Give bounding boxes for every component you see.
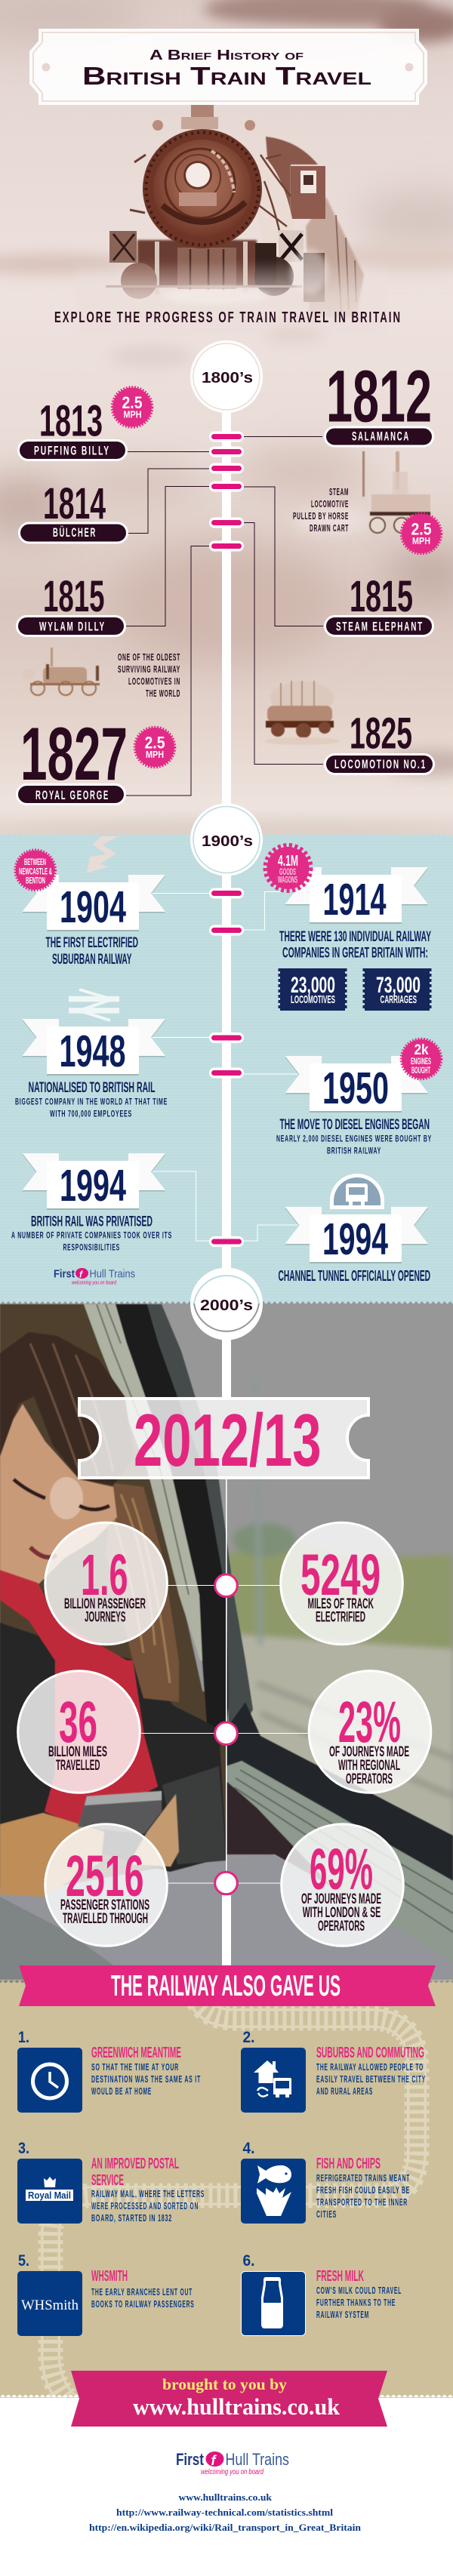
caption: Wylam Dilly xyxy=(118,651,180,699)
icon: milk bottle xyxy=(261,2277,283,2328)
stat: 5249 miles of track electrified xyxy=(281,1522,402,1645)
entry: 1827 Royal George: 1827 xyxy=(20,712,128,796)
item 5: WHSmith: 5. xyxy=(18,2252,29,2270)
entry: 1994 privatised: 1994 xyxy=(60,1161,126,1211)
timeline ticks 1800s xyxy=(209,432,244,551)
item 1: Greenwich Meantime: DESTINATION WAS THE SAME AS IT xyxy=(91,2074,201,2085)
entry: 1815 Steam Elephant: 1815 xyxy=(350,572,413,621)
entry: 1815 Steam Elephant xyxy=(325,572,433,636)
badge: between Newcastle and Benton xyxy=(15,850,56,890)
timeline trunk xyxy=(222,408,231,1965)
item 4: fish and chips: 4. xyxy=(243,2140,255,2157)
node: 2000's xyxy=(190,1268,263,1340)
item 4: fish and chips: CITIES xyxy=(316,2209,337,2220)
entry: 1813 Puffing Billy xyxy=(18,397,127,460)
section: beige legacy background with track xyxy=(0,1980,453,2576)
stat: 5249 miles of track electrified: ELECTRIFIED xyxy=(316,1609,365,1626)
entry: 1813 Puffing Billy: PUFFING BILLY xyxy=(34,444,110,457)
entry: 1814 Blucher xyxy=(20,479,127,543)
item 5: WHSmith: BOOKS TO RAILWAY PASSENGERS xyxy=(91,2299,195,2310)
stat: 5249 miles of track electrified: 5249 xyxy=(300,1543,381,1608)
item 1: Greenwich Meantime: GREENWICH MEANTIME xyxy=(91,2045,181,2061)
item 6: fresh milk: RAILWAY SYSTEM xyxy=(316,2310,369,2320)
item 5: WHSmith: THE EARLY BRANCHES LENT OUT xyxy=(91,2287,193,2297)
stat: 2516 passenger stations: 2516 xyxy=(66,1844,143,1909)
stat: 36 billion miles travelled: BILLION MILES xyxy=(48,1743,107,1760)
entry: 1815 Wylam Dilly: 1815 xyxy=(43,572,104,621)
title line 2: British Train Travel xyxy=(82,62,371,90)
sources: http://en.wikipedia.org/wiki/Rail_transport_in_Great_Britain xyxy=(89,2522,361,2533)
item 1: Greenwich Meantime: SO THAT THE TIME AT YOUR xyxy=(91,2062,179,2073)
badge: between Newcastle and Benton: BETWEEN xyxy=(24,857,46,867)
locomotive top plate xyxy=(181,117,218,129)
entry: 1994 channel tunnel: 1994 xyxy=(322,1214,388,1264)
stat: 2516 passenger stations: PASSENGER STATIONS xyxy=(60,1897,149,1913)
stat: 36 billion miles travelled xyxy=(18,1671,140,1793)
stat: 23% of journeys made with regional operators: OPERATORS xyxy=(346,1771,393,1787)
section: 1800s sky background xyxy=(0,0,453,839)
entry: 1813 Puffing Billy: 1813 xyxy=(39,397,103,445)
banner: the railway also gave us xyxy=(19,1965,436,2006)
locomotive lower body xyxy=(137,240,257,287)
badge: 1813 speed: 2.5 xyxy=(122,393,142,412)
badge: 1827 speed: 2.5 xyxy=(145,734,165,752)
logo: First Hull Trains small: welcoming you on board xyxy=(72,1280,117,1286)
stat: 23% of journeys made with regional operators xyxy=(309,1671,431,1793)
stat stamp: 73,000 carriages: CARRIAGES xyxy=(381,993,417,1006)
item 2: Suburbs and commuting: 2. xyxy=(243,2029,255,2046)
entry: 1994 privatised: A NUMBER OF PRIVATE COMPANIES TOOK OVER ITS xyxy=(11,1230,172,1241)
entry: 1994 privatised: BRITISH RAIL WAS PRIVATISED xyxy=(31,1214,153,1230)
caption: Wylam Dilly: LOCOMOTIVES IN xyxy=(128,676,180,687)
locomotive headlight xyxy=(183,161,212,189)
item 6: fresh milk xyxy=(242,2252,402,2335)
infographic canvas: LOCOMOTIVE xyxy=(311,498,349,509)
logo: First Hull Trains large: Hull Trains xyxy=(225,2450,289,2469)
caption: Salamanca: DRAWN CART xyxy=(310,522,349,534)
banner: brought to you by: www.hulltrains.co.uk xyxy=(133,2393,341,2420)
stat: 1.6 billion passenger journeys: 1.6 xyxy=(81,1543,128,1608)
stat stamp: 23,000 locomotives: 23,000 xyxy=(291,973,335,998)
entry: 1827 Royal George xyxy=(17,712,128,805)
timeline nodes 2000s xyxy=(215,1574,237,1894)
logo: First Hull Trains large: welcoming you on board xyxy=(201,2468,263,2476)
item 3: improved postal service: 3. xyxy=(18,2140,29,2157)
infographic canvas: STEAM xyxy=(329,486,349,497)
badge: 4.1M goods wagons: GOODS xyxy=(279,866,296,877)
entry: 1950 xyxy=(276,1056,432,1156)
node: 1800's: 1800’s xyxy=(202,370,253,386)
stat: 69% of journeys made with London and SE operators: OPERATORS xyxy=(318,1918,365,1934)
photo: window frame xyxy=(0,1304,453,1966)
node: 1900's xyxy=(190,803,263,876)
badge: 1827 speed xyxy=(134,727,175,768)
stat stamp: 23,000 locomotives xyxy=(280,968,345,1011)
stat: 5249 miles of track electrified: MILES OF TRACK xyxy=(308,1596,374,1612)
connectors 1800s xyxy=(126,436,323,796)
item 1: Greenwich Meantime: WOULD BE AT HOME xyxy=(91,2086,152,2097)
node: 1900's: 1900’s xyxy=(202,833,253,850)
sources xyxy=(89,2492,361,2533)
stat: 69% of journeys made with London and SE operators: 69% xyxy=(310,1837,373,1902)
locomotive side boiler xyxy=(255,149,296,245)
icon: British Rail double arrow xyxy=(69,989,119,1020)
stat stamp: 73,000 carriages: 73,000 xyxy=(376,973,421,998)
badge: 2k engines bought xyxy=(401,1039,442,1079)
badge: 1827 speed: MPH xyxy=(146,749,164,760)
item 5: WHSmith xyxy=(17,2252,195,2336)
timeline ticks 1900s xyxy=(209,888,244,1247)
entry: 1994 privatised: RESPONSIBILITIES xyxy=(63,1242,120,1253)
node: 2000's: 2000’s xyxy=(200,1297,253,1314)
section: 2000s photograph background xyxy=(0,1301,453,1993)
entry: 1914: 1914 xyxy=(323,875,387,925)
stat: 23% of journeys made with regional operators: 23% xyxy=(338,1690,401,1755)
item 5: WHSmith: WHSMITH xyxy=(91,2268,128,2285)
logo: First Hull Trains small xyxy=(54,1268,135,1286)
item 2: Suburbs and commuting: AND RURAL AREAS xyxy=(316,2086,373,2097)
locomotive pilot rail xyxy=(106,285,302,288)
stat: 36 billion miles travelled: TRAVELLED xyxy=(56,1757,100,1774)
logo: First Hull Trains large: First xyxy=(176,2450,205,2469)
locomotive tender xyxy=(266,137,318,216)
entry: 1904: THE FIRST ELECTRIFIED xyxy=(45,934,138,951)
locomotive boiler front xyxy=(143,129,262,248)
locomotive carriages xyxy=(306,197,364,317)
ticket: 2012/13: 2012/13 xyxy=(134,1399,322,1482)
entry: 1994 channel tunnel xyxy=(278,1207,430,1285)
photo: woman xyxy=(0,1332,226,1897)
caption: Wylam Dilly: SURVIVING RAILWAY xyxy=(118,663,180,675)
item 3: improved postal service: BOARD, STARTED IN 1832 xyxy=(91,2213,172,2224)
stat: 2516 passenger stations xyxy=(45,1824,167,1946)
stat: 1.6 billion passenger journeys: BILLION PASSENGER xyxy=(64,1596,146,1612)
entry: 1904 xyxy=(23,875,165,968)
photo: table xyxy=(0,1854,453,1993)
item 6: fresh milk: 6. xyxy=(243,2252,255,2270)
stat: 69% of journeys made with London and SE operators xyxy=(282,1824,403,1946)
stat: 69% of journeys made with London and SE operators: OF JOURNEYS MADE xyxy=(301,1891,381,1907)
item 3: improved postal service xyxy=(17,2140,205,2224)
caption: Wylam Dilly: THE WORLD xyxy=(146,688,180,699)
item 3: improved postal service: SERVICE xyxy=(91,2172,124,2189)
title line 1: A Brief History of xyxy=(149,48,304,63)
entry: 1948 xyxy=(15,1019,168,1119)
entry: 1948: NATIONALISED TO BRITISH RAIL xyxy=(29,1079,156,1096)
item 3: improved postal service: WERE PROCESSED AND SORTED ON xyxy=(91,2201,199,2211)
badge: between Newcastle and Benton: NEWCASTLE & xyxy=(19,866,52,877)
title plaque xyxy=(29,29,427,105)
entry: 1948: BIGGEST COMPANY IN THE WORLD AT THAT TIME xyxy=(15,1096,168,1106)
item 3: improved postal service: RAILWAY MAIL, WHERE THE LETTERS xyxy=(91,2189,205,2199)
sources: http://www.railway-technical.com/statistics.shtml xyxy=(116,2507,334,2518)
entry: 1950: BRITISH RAILWAY xyxy=(327,1146,381,1156)
entry: 1994 privatised xyxy=(11,1153,172,1253)
badge: 4.1M goods wagons: 4.1M xyxy=(278,853,298,869)
badge: Salamanca speed xyxy=(401,513,442,554)
mist over locomotive xyxy=(76,260,385,336)
badge: 1813 speed xyxy=(112,387,153,427)
illustration: Salamanca locomotive xyxy=(362,451,430,533)
badge: 4.1M goods wagons: WAGONS xyxy=(278,874,297,885)
entry: 1812 Salamanca: SALAMANCA xyxy=(352,430,410,444)
stat stamp: 73,000 carriages xyxy=(365,968,430,1011)
stat: 69% of journeys made with London and SE operators: WITH LONDON & SE xyxy=(303,1904,381,1921)
illustration: Wylam Dilly locomotive xyxy=(23,648,100,695)
railway track xyxy=(51,2000,417,2404)
stat: 1.6 billion passenger journeys xyxy=(45,1522,167,1645)
badge: 2k engines bought: BOUGHT xyxy=(411,1065,430,1076)
icon: lightning bolt xyxy=(87,836,119,873)
caption: Salamanca xyxy=(293,486,349,534)
logo: First Hull Trains small: First xyxy=(54,1268,75,1280)
caption: Wylam Dilly: ONE OF THE OLDEST xyxy=(118,651,180,663)
locomotive chimney xyxy=(191,105,214,121)
entry: 1904: SUBURBAN RAILWAY xyxy=(52,951,131,968)
badge: between Newcastle and Benton: BENTON xyxy=(26,876,45,886)
logo: First Hull Trains small: f xyxy=(79,1270,83,1280)
illustration: steam locomotive xyxy=(76,105,385,367)
item 4: fish and chips xyxy=(241,2140,410,2224)
stat stamp: 23,000 locomotives: LOCOMOTIVES xyxy=(291,993,335,1006)
badge: 4.1M goods wagons xyxy=(266,845,311,891)
entry: 1815 Wylam Dilly: WYLAM DILLY xyxy=(39,620,106,634)
item 1: Greenwich Meantime: 1. xyxy=(18,2029,29,2046)
entry: 1914 xyxy=(279,867,431,962)
section: 1900s teal background xyxy=(0,833,453,1304)
entry: 1825 Locomotion No.1 xyxy=(325,709,433,774)
item 1: Greenwich Meantime xyxy=(17,2029,201,2113)
badge: Salamanca speed: 2.5 xyxy=(411,519,432,539)
connectors 2000s xyxy=(141,1585,308,1883)
icon: fish and chips xyxy=(257,2165,291,2216)
photo: view from window xyxy=(226,1377,453,1842)
icon: WHSmith logo: WHSmith xyxy=(21,2297,79,2313)
icon: clock xyxy=(33,2064,66,2098)
badge: 2k engines bought: ENGINES xyxy=(411,1056,431,1066)
node: 1800's xyxy=(190,340,263,413)
item 6: fresh milk: FRESH MILK xyxy=(316,2268,364,2285)
icon: channel tunnel xyxy=(330,1174,384,1209)
connectors 1900s xyxy=(151,892,299,1241)
entry: 1948: 1948 xyxy=(59,1026,125,1076)
item 2: Suburbs and commuting xyxy=(241,2029,426,2113)
logo: First Hull Trains small: Hull Trains xyxy=(89,1268,135,1280)
badge: Salamanca speed: MPH xyxy=(412,535,430,546)
entry: 1814 Blucher: BÜLCHER xyxy=(53,525,97,540)
icon: Royal Mail xyxy=(26,2177,73,2201)
sources: www.hulltrains.co.uk xyxy=(178,2492,272,2503)
caption: Salamanca: PULLED BY HORSE xyxy=(293,510,349,522)
entry: 1827 Royal George: ROYAL GEORGE xyxy=(35,789,109,802)
icon: Royal Mail: Royal Mail xyxy=(28,2190,71,2201)
stat: 1.6 billion passenger journeys: JOURNEYS xyxy=(85,1609,125,1626)
entry: 1814 Blucher: 1814 xyxy=(43,479,106,528)
entry: 1948: WITH 700,000 EMPLOYEES xyxy=(50,1108,132,1119)
banner: brought to you by: brought to you by xyxy=(162,2375,288,2393)
icon: house and bus xyxy=(254,2060,291,2097)
item 3: improved postal service: AN IMPROVED POSTAL xyxy=(91,2156,179,2172)
badge: 2k engines bought: 2k xyxy=(414,1042,429,1058)
illustration: Locomotion No.1 xyxy=(264,681,340,745)
badge: 1813 speed: MPH xyxy=(124,409,142,420)
logo: First Hull Trains large xyxy=(176,2450,289,2476)
entry: 1815 Wylam Dilly xyxy=(17,572,125,636)
entry: 1950: 1950 xyxy=(322,1063,389,1113)
item 4: fish and chips: FISH AND CHIPS xyxy=(316,2156,381,2172)
logo: First Hull Trains large: f xyxy=(211,2453,217,2468)
stat: 2516 passenger stations: TRAVELLED THROUGH xyxy=(63,1910,148,1927)
entry: 1825 Locomotion No.1: 1825 xyxy=(350,709,412,758)
entry: 1904: 1904 xyxy=(60,882,126,932)
banner: brought to you by xyxy=(71,2371,387,2427)
stat: 36 billion miles travelled: 36 xyxy=(59,1690,97,1755)
locomotive number plate xyxy=(179,192,217,206)
